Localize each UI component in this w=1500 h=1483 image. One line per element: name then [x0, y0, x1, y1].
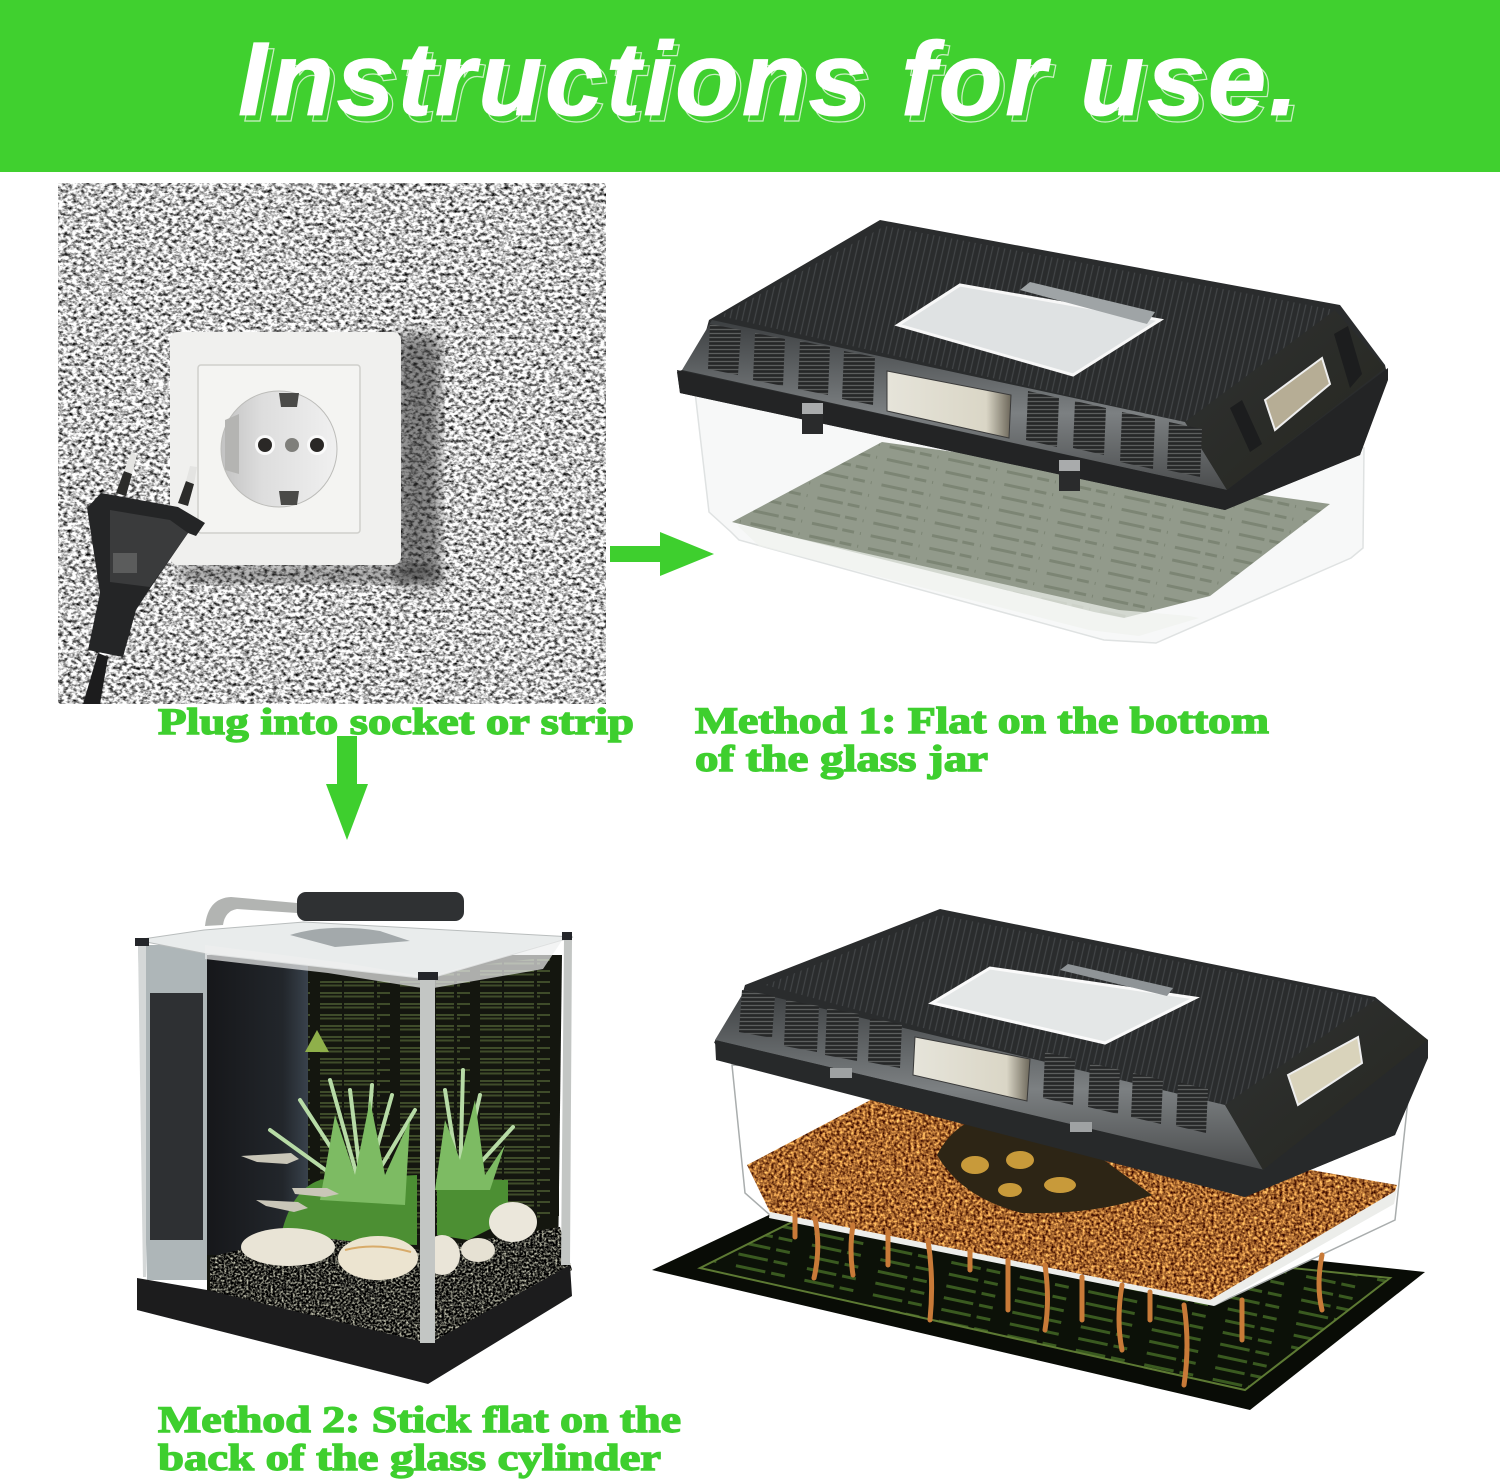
photo: terrarium with mat underneath	[677, 220, 1388, 643]
lid	[714, 909, 1428, 1197]
arrow: socket to method 2	[326, 736, 368, 840]
clear box	[695, 392, 1364, 643]
snake	[937, 1115, 1152, 1213]
photo: aquarium with mat on the back	[135, 892, 575, 1384]
photo: terrarium with reptile on heat mat	[652, 909, 1428, 1410]
caption: method 1: of the glass jar	[695, 739, 988, 780]
faded mat	[732, 442, 1330, 618]
heat mat	[652, 1205, 1425, 1410]
title: Instructions for use.	[243, 27, 1303, 144]
left glass and filter	[138, 945, 207, 1280]
lamp	[205, 897, 297, 926]
caption: plug: Plug into socket or strip	[158, 702, 634, 743]
soil	[740, 1090, 1405, 1305]
caption: method 1	[695, 701, 1269, 780]
title: Instructions for use.	[238, 21, 1298, 138]
banner	[0, 0, 1500, 172]
gravel	[210, 1227, 572, 1342]
stones	[241, 1228, 335, 1266]
arrow: socket to method 1	[610, 532, 714, 576]
base	[137, 1265, 572, 1384]
caption: method 2: Method 2: Stick flat on the	[158, 1400, 681, 1441]
lid and posts	[136, 922, 573, 979]
caption: method 1: Method 1: Flat on the bottom	[695, 701, 1269, 742]
roots of heat	[795, 1215, 1322, 1385]
fish	[241, 1153, 339, 1212]
plants	[280, 1175, 508, 1245]
caption: method 2: back of the glass cylinder	[158, 1438, 661, 1479]
photo: wall socket and plug	[58, 183, 606, 704]
caption: method 2	[158, 1400, 681, 1479]
back panel	[207, 955, 562, 1295]
glass box	[732, 1065, 1408, 1305]
lid	[677, 220, 1388, 510]
